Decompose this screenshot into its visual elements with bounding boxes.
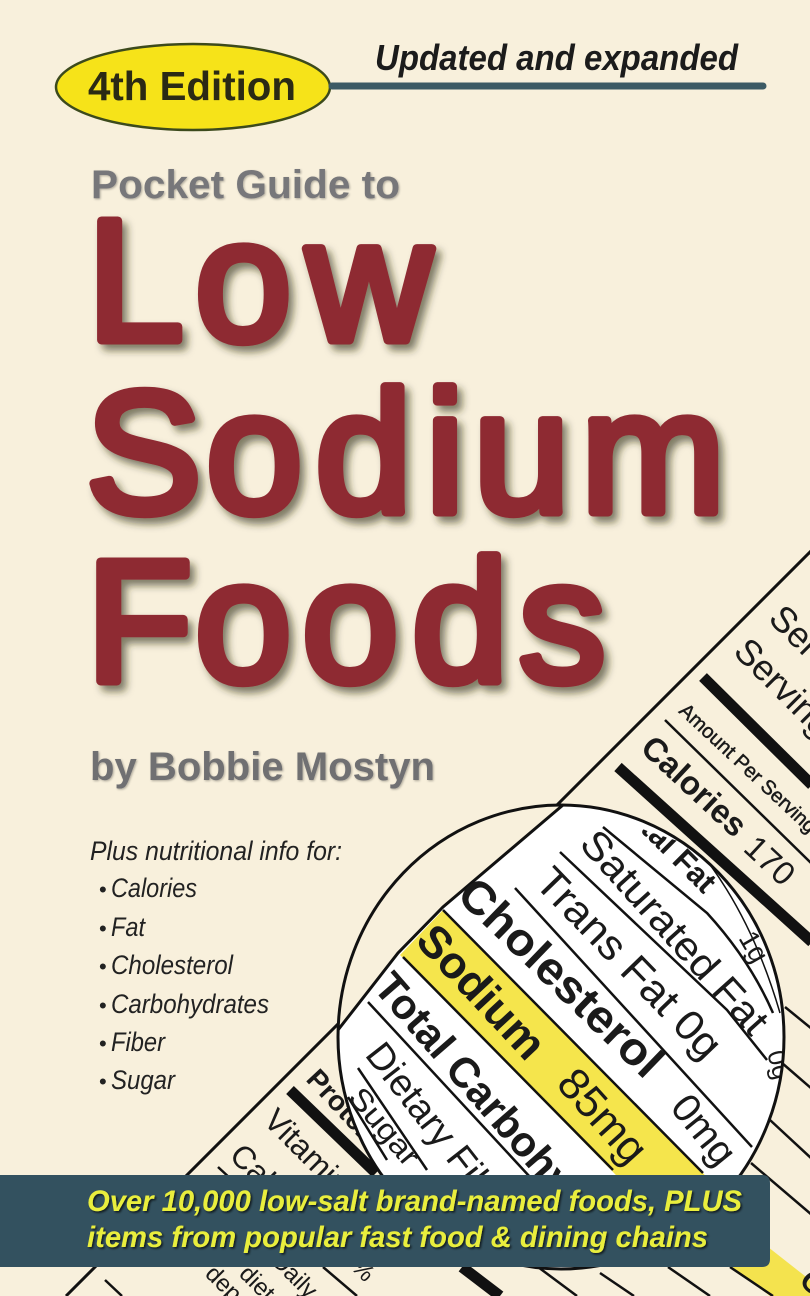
nutrition list: • — [99, 1031, 107, 1056]
bottom banner: items from popular fast food & dining chains — [87, 1221, 708, 1254]
nutrition list: Sugar — [111, 1065, 176, 1095]
magnifying glass: Sodium — [407, 914, 557, 1069]
nutrition label background: Vitamin A — [257, 1101, 378, 1223]
magnifying glass — [336, 804, 786, 1270]
nutrition list: Cholesterol — [111, 950, 234, 980]
magnifying glass: 1g — [733, 926, 775, 968]
nutrition list — [90, 836, 342, 1095]
magnifying glass: Sugar — [342, 1081, 426, 1173]
magnifying glass: Cholesterol — [448, 867, 674, 1088]
magnifying glass: Saturated Fat — [571, 822, 777, 1043]
bottom banner: Over 10,000 low-salt brand-named foods, PLUS — [87, 1185, 742, 1218]
main title: Sodium — [86, 355, 725, 549]
nutrition label background: Calories — [634, 728, 755, 844]
nutrition list: Plus nutritional info for: — [90, 836, 342, 866]
nutrition list: • — [99, 916, 107, 941]
nutrition list: • — [99, 954, 107, 979]
updated and expanded tagline: Updated and expanded — [375, 37, 739, 78]
author: by Bobbie Mostyn — [90, 745, 435, 789]
magnifying glass: 0g — [761, 1047, 798, 1082]
magnifying glass: 0mg — [662, 1086, 745, 1174]
main title: Foods — [86, 524, 606, 718]
nutrition label background — [66, 550, 810, 1296]
nutrition list: • — [99, 877, 107, 902]
nutrition label background: Calcium — [223, 1136, 330, 1244]
magnifying glass: Total Carbohydrate — [365, 963, 651, 1282]
nutrition list: Carbohydrates — [111, 989, 269, 1019]
magnifying glass: 85mg — [548, 1059, 658, 1173]
main title: Low — [87, 183, 433, 377]
nutrition label background: 170 — [737, 828, 803, 893]
edition badge: 4th Edition — [88, 63, 296, 109]
bottom banner — [0, 1175, 770, 1267]
magnifying glass: Total Fat — [609, 785, 724, 900]
main title — [86, 183, 725, 718]
nutrition list: Fat — [111, 912, 146, 942]
nutrition list: • — [99, 993, 107, 1018]
nutrition list: • — [99, 1069, 107, 1094]
nutrition list: Fiber — [111, 1027, 166, 1057]
magnifying glass: Trans Fat 0g — [527, 858, 732, 1068]
edition badge — [56, 44, 330, 130]
subtitle: Pocket Guide to — [91, 163, 400, 207]
nutrition label background: Protein — [301, 1063, 389, 1155]
nutrition label background: % — [346, 1253, 380, 1287]
magnifying glass: Dietary Fiber — [357, 1035, 524, 1232]
nutrition list: Calories — [111, 873, 197, 903]
